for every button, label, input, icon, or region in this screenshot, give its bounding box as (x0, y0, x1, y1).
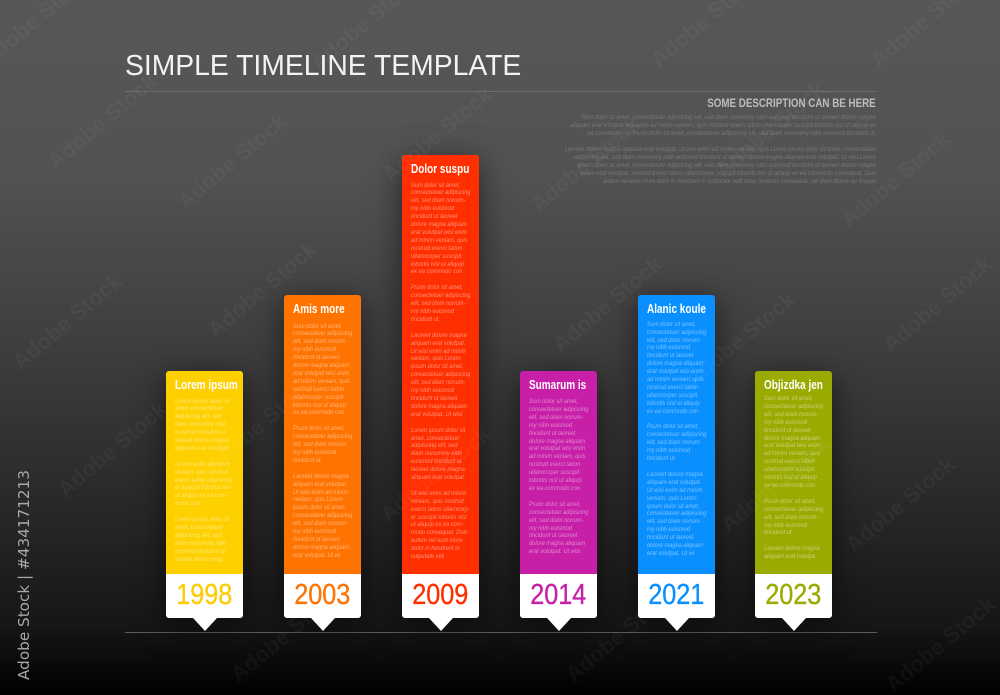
text: 2021: tincidunt ut laoreet (647, 534, 693, 541)
text: 2021: my nibh euismod (647, 344, 690, 351)
pointer (547, 618, 571, 631)
description heading: SOME DESCRIPTION CAN BE HERE (708, 96, 876, 110)
text: 1998: aliquam erat volutpat. (175, 445, 229, 452)
text: 2021: ullamcorper suscipit (647, 392, 697, 399)
year: 2003: 2003 (294, 579, 351, 611)
year: 2003 (284, 574, 361, 618)
text: 2021: ipsum dolor sit amet, (647, 503, 699, 510)
text: 2009: Sum dolor sit amet, (411, 182, 460, 188)
text: 2023: Psum dolor sit amet, (764, 498, 816, 505)
text: 2003: dolore magna aliquam (293, 544, 349, 551)
text: 2021: consectetuer adipiscing (647, 329, 706, 336)
text: 1998: euismod tincidunt ut (175, 548, 226, 555)
watermark overlay: Adobe Stock (841, 451, 960, 557)
text: 2009: my nibh euismod (411, 308, 454, 315)
year: 1998 (166, 574, 243, 618)
text: 2009: aliquam erat volutpat. (411, 474, 465, 481)
text: 2003: my nibh euismod (293, 449, 336, 456)
text: 2009: vulputate veli (411, 553, 444, 560)
text: 2009: amet, consectetuer (411, 434, 459, 442)
text: 2021: aliquam erat volutpat. (647, 479, 701, 486)
text: 2014: erat volutpat wisi enim (529, 445, 585, 452)
watermark overlay: Adobe Stock (711, 76, 830, 182)
text: 2014: elit, sed diam nonum- (529, 414, 583, 421)
text: 2009: autem vel eum iriure (411, 537, 463, 544)
text: 2014: Sum dolor sit amet, (529, 398, 578, 405)
text: 2023: ullamcorper suscipit (764, 466, 814, 473)
text: 1998: Lorem ipsum dolor sit (175, 398, 229, 404)
text: 2009: veniam, quis Lorem (411, 355, 461, 362)
text: 2009: erat volutpat wisi enim (411, 229, 467, 236)
text: 2021: Ut wisi enim ad minim (647, 487, 702, 494)
year: 2021 (638, 574, 715, 618)
panel: 2003 (284, 295, 361, 618)
text: 1998: Lorem ipsum dolor sit (175, 516, 229, 523)
text: 1998: amet, consectetuer (175, 524, 223, 531)
text: 2023: Laoreet dolore magna (764, 545, 820, 552)
text: 2003: ad minim veniam, quis (293, 378, 350, 385)
year: 1998: 1998 (176, 579, 233, 611)
text: 2009: aliquam erat volutpat. (411, 340, 465, 347)
text: 2021: erat volutpat wisi enim (647, 368, 703, 375)
text: 2009: diam nonummy nibh (411, 450, 462, 457)
text: 2009: dolor in hendrerit in (411, 545, 460, 552)
text: 2003: ipsum dolor sit amet, (293, 504, 345, 511)
text: 1998: Ut wisi enim ad minim (175, 461, 230, 468)
year: 2021: 2021 (648, 579, 705, 611)
text: 2009: consectetuer adipiscing (411, 292, 470, 299)
text: 2014: my nibh euismod (529, 524, 572, 532)
watermark overlay: Adobe Stock (201, 371, 320, 477)
text: 2009: consectetuer adipiscing (411, 371, 470, 378)
watermark overlay: Adobe Stock (376, 421, 495, 527)
text: 2014: nostrud exerci tation (529, 461, 580, 468)
text: 2009: ad minim veniam, quis (411, 237, 468, 244)
panel: 1998 (166, 371, 243, 618)
text: 2021: dolore magna aliquam (647, 360, 703, 367)
text: 2003: elit, sed diam nonum- (293, 338, 347, 345)
heading: Dolor suspu: Dolor suspu (411, 162, 469, 176)
text: 2003: tincidunt ut laoreet (293, 354, 339, 361)
text: 2021: veniam, quis Lorem (647, 495, 697, 502)
watermark overlay: Adobe Stock (836, 126, 955, 232)
text: 2021: my nibh euismod (647, 526, 690, 533)
text: 2014: lobortis nisl ut aliquip (529, 477, 582, 484)
description text (564, 114, 876, 184)
text: 2003: Sum dolor sit amet, (293, 322, 342, 330)
text: 2023: consectetuer adipiscing (764, 403, 823, 410)
year: 2023 (755, 574, 832, 618)
text: 2009: tincidunt ut. (411, 316, 440, 323)
text: 2014: ad minim veniam, quis (529, 453, 586, 460)
watermark overlay: Adobe Stock (53, 396, 172, 502)
text: 2021: dolore magna aliquam (647, 542, 703, 549)
watermark overlay: Adobe Stock (173, 108, 292, 214)
watermark overlay: Adobe Stock (881, 591, 1000, 695)
pointer (429, 618, 453, 631)
text: 1998: exerci tation ullamcorp- (175, 477, 234, 484)
year: 2023: 2023 (765, 579, 822, 611)
timeline axis (125, 632, 877, 633)
text: 2003: nostrud exerci tation (293, 386, 344, 393)
text: 2021: elit, sed diam nonum- (647, 336, 701, 344)
text: 1998: veniam, quis nostrud (175, 469, 227, 476)
heading: Lorem ipsum: Lorem ipsum (175, 378, 238, 392)
text: 2023: dolore magna aliquam (764, 435, 820, 442)
text: 2009: tincidunt ut laoreet (411, 395, 457, 402)
text: 2009: elit, sed diam nonum- (411, 300, 465, 307)
text: 2014: my nibh euismod (529, 422, 572, 429)
text: 2023: Sum dolor sit amet, (764, 395, 813, 402)
text: 2003: veniam, quis Lorem (293, 496, 343, 503)
watermark overlay: Adobe Stock (8, 268, 127, 374)
text: 2003: dolore magna aliquam (293, 362, 349, 369)
watermark overlay: Adobe Stock (681, 286, 800, 392)
title: SIMPLE TIMELINE TEMPLATE (125, 49, 521, 81)
text: 2003: consectetuer adipiscing (293, 512, 352, 519)
panel: 2009 (402, 155, 479, 618)
text: 2021: nostrud exerci tation (647, 384, 698, 391)
text: 2014: consectetuer adipiscing (529, 509, 588, 516)
watermark overlay: Adobe Stock (716, 431, 835, 537)
text: 2014: tincidunt ut uaoreet (529, 532, 577, 539)
text: 1998: er suscipit lobortis nisl (175, 484, 231, 491)
text: 2003: Psum dolor sit amet, (293, 425, 345, 432)
text: 1998: adipiscing elit, sed (175, 413, 221, 420)
text: 2021: ad minim veniam, quis (647, 376, 704, 383)
text: 2009: Ut wisi enim ad minim (411, 490, 466, 497)
text: 2021: tincidunt ut. (647, 455, 676, 462)
text: 2003: elit, sed diam nonum- (293, 441, 347, 448)
text: 2003: tincidunt ut laoreet (293, 536, 339, 543)
watermark overlay: Adobe Stock (226, 581, 345, 687)
heading: Alanic koule: Alanic koule (647, 302, 706, 316)
text: 2009: lobortis nisl ut aliquip (411, 261, 464, 268)
text: 1998: laoreet dolore magna (175, 437, 229, 444)
text: 2021: erat volutpat. Ut wi (647, 550, 694, 557)
year: 2014 (520, 574, 597, 618)
text: 1998: modo con (175, 500, 200, 507)
text: 2003: erat volutpat wisi enim (293, 370, 349, 377)
text: 2009: my nibh euismod (411, 205, 454, 212)
text: 2003: lobortis nisl ut aliquip (293, 402, 346, 409)
text: 2021: ex ea commodo con (647, 408, 698, 415)
watermark overlay: Adobe Stock (203, 236, 322, 342)
pointer (665, 618, 689, 631)
text: 2021 (647, 321, 706, 557)
text: 1998: ut aliquip ex ea com- (175, 492, 227, 499)
description text: autem vel eum iriure dolor in hendrerit in vulputate velit esse molestie consequat, vel illum dolore eu feugiat (603, 178, 876, 184)
text: 2009: nostrud exerci tation (411, 245, 462, 252)
text: 2009: ipsum dolor sit amet, (411, 363, 463, 370)
text: 2003: ex ea commodo con (293, 409, 344, 416)
text: 2023: tincidunt ut laoreet (764, 427, 810, 434)
text: 2014: tincidunt ut laoreet (529, 430, 575, 437)
text: 2023: consectetuer adipiscing (764, 506, 823, 513)
text: 1998: euismod tincidunt ut (175, 429, 226, 436)
description text: quam erat volutpat. nostrud exerci tation ullamcorper suscipit lobortis nisl ut aliquip ex ea commodo consequat. Duis (581, 170, 876, 176)
stock id label: Adobe Stock | #434171213 (15, 470, 33, 680)
description text: Sum dolor sit amet, consectetuer adipiscing elit, sed diam nonummy nibh euismod tincidunt ut laoreet dolore magna (581, 114, 876, 120)
text: 2021: my nibh euismod (647, 447, 690, 454)
text: 2023: elit, sed diam nonum- (764, 411, 818, 418)
heading: Sumarum is: Sumarum is (529, 378, 586, 392)
text: 2003: tincidunt ut. (293, 457, 322, 464)
text: 2009: consectetuer adipiscing (411, 189, 470, 196)
text: 1998: adipiscing elit, sed (175, 532, 221, 539)
watermark overlay: Adobe Stock (878, 251, 997, 357)
text: 2009: laoreet dolore magna (411, 466, 465, 473)
text: 2014: dolore magna aliquam (529, 438, 585, 445)
text: 2023: erat volutpat wisi enim (764, 442, 820, 449)
text: 2009: Ut wisi enim ad minim (411, 348, 466, 355)
text: 2021: tincidunt ut laoreet (647, 352, 693, 359)
text: 2021: Psum dolor sit amet, (647, 423, 699, 430)
text: 2009 (411, 182, 470, 560)
text: 2023: elit, sed diam nonum- (764, 514, 818, 521)
pointer (782, 618, 806, 631)
text: 2014: ullamcorper suscipit (529, 469, 579, 476)
text: 2003 (293, 322, 352, 559)
heading: Amis more: Amis more (293, 302, 345, 316)
year: 2014: 2014 (530, 579, 587, 611)
text: 2023: my nibh euismod (764, 522, 807, 528)
text: 2014: erat volutpat. Ut wisi (529, 548, 580, 555)
description text: ipsum dolor sit amet, consectetuer adipiscing elit, sed diam nonummy nibh euismod tincidunt ut laoreet dolore magna (578, 162, 876, 168)
text: 2021: lobortis nisl ut aliquip (647, 400, 700, 407)
watermark overlay: Adobe Stock (561, 581, 680, 687)
text: 2009: veniam, quis nostrud (411, 498, 463, 505)
text: 2023: ex ea commodo con (764, 482, 815, 489)
text: 2009: er suscipit lobortis nisl (411, 514, 467, 521)
watermark overlay: Adobe Stock (43, 68, 162, 174)
text: 2014: elit, sed diam nonum- (529, 517, 583, 524)
text: 2009: Laoreet dolore magna (411, 332, 467, 339)
text: 2023: nostrud exerci tation (764, 458, 815, 465)
text: 2009: ut aliquip ex ea com- (411, 521, 463, 528)
panel: 2021 (638, 295, 715, 618)
text: 2009: dolore magna aliquam (411, 221, 467, 228)
text: 2021: elit, sed diam nonum- (647, 518, 701, 525)
text: 2003: elit, sed diam nonum- (293, 520, 347, 527)
year: 2009 (402, 574, 479, 618)
text: 2009: ullamcorper suscipit (411, 253, 461, 260)
text: 2003: erat volutpat. Ut wi (293, 552, 340, 559)
watermark overlay: Adobe Stock (526, 111, 645, 217)
text: 1998 (175, 398, 234, 563)
text: 2009: exerci tation ullamcorp- (411, 506, 470, 513)
text: 2014: Psum dolor sit amet, (529, 501, 581, 508)
text: 2009: tincidunt ut laoreet (411, 213, 457, 220)
description text: ea commodo con Psum dolor sit amet, consectetuer adipiscing elit, sed diam nonummy nibh euismod tincidunt ut. (587, 130, 876, 136)
year: 2009: 2009 (412, 579, 469, 611)
text: 2003: ullamcorper suscipit (293, 394, 343, 401)
text: 2003: my nibh euismod (293, 528, 336, 535)
text: 2009: dolore magna aliquam (411, 403, 467, 410)
text: 2009: elit, sed diam nonum- (411, 197, 465, 204)
text: 2021: consectetuer adipiscing (647, 431, 706, 438)
panel: 2014 (520, 371, 597, 618)
text: 2009: euismod tincidunt ut (411, 458, 462, 465)
text: 2021: Laoreet dolore magna (647, 471, 703, 478)
heading: Objizdka jen: Objizdka jen (764, 378, 823, 392)
text: 2009: Lorem ipsum dolor sit (411, 427, 465, 434)
pointer (311, 618, 335, 631)
pointer (193, 618, 217, 631)
text: 2003: aliquam erat volutpat. (293, 481, 347, 488)
text: 2023: lobortis nisl ut aliquip (764, 474, 817, 481)
text: 2003: consectetuer adipiscing (293, 330, 352, 337)
text: 2003: Laoreet dolore magna (293, 473, 349, 480)
text: 2023: my nibh euismod (764, 419, 807, 426)
text: 2023: ad minim veniam, quis (764, 450, 821, 457)
text: 2003: my nibh euismod (293, 346, 336, 353)
text: 2014: consectetuer adipiscing (529, 406, 588, 413)
text: 2003: Ut wisi enim ad minim (293, 489, 348, 496)
text: 2009: adipiscing elit, sed (411, 442, 457, 449)
text: 2009: ex ea commodo con (411, 268, 462, 275)
text: 2021: consectetuer adipiscing (647, 510, 706, 517)
text: 2003: consectetuer adipiscing (293, 433, 352, 440)
text: 2023: aliquam erat volutpa (764, 553, 815, 560)
text: 1998: amet, consectetuer (175, 405, 223, 412)
text: 2014: ex ea commodo con (529, 485, 580, 492)
text: 2023 (764, 395, 824, 560)
text: 2014 (529, 398, 588, 555)
text: 2009: Psum dolor sit amet, (411, 284, 463, 291)
text: 1998: diam nonummy nibh (175, 540, 226, 547)
description text: aliquam erat volutpat wisi enim ad minim veniam, quis nostrud exerci tation ullamcorper suscipit lobortis nisl ut aliquip ex (570, 122, 876, 128)
text: 2021: elit, sed diam nonum- (647, 439, 701, 446)
panel: 2023 (755, 371, 832, 618)
text: 2023: tincidunt ut. (764, 529, 793, 536)
watermark overlay: Adobe Stock (378, 81, 497, 187)
text: 2009: my nibh euismod (411, 387, 454, 394)
text: 2009: erat volutpat. Ut wisi (411, 411, 462, 418)
text: 2021: Sum dolor sit amet, (647, 321, 696, 328)
description text: Laoreet dolore magna aliquam erat volutpat. Ut wisi enim ad minim veniam, quis Lorem ipsum dolor sit amet, consectetuer (565, 146, 876, 152)
text: 2014: dolore magna aliquam (529, 540, 585, 547)
watermark overlay: Adobe Stock (548, 251, 667, 357)
text: 2009: modo consequat. Duis (411, 529, 468, 536)
text: 2009: elit, sed diam nonum- (411, 379, 465, 386)
text: 1998: laoreet dolore mag (175, 556, 222, 563)
description text: adipiscing elit, sed diam nonummy nibh euismod tincidunt ut laoreet dolore magna aliquam erat volutpat. Ut wisi Lorem (574, 154, 876, 160)
text: 1998: diam nonummy nibh (175, 421, 226, 428)
